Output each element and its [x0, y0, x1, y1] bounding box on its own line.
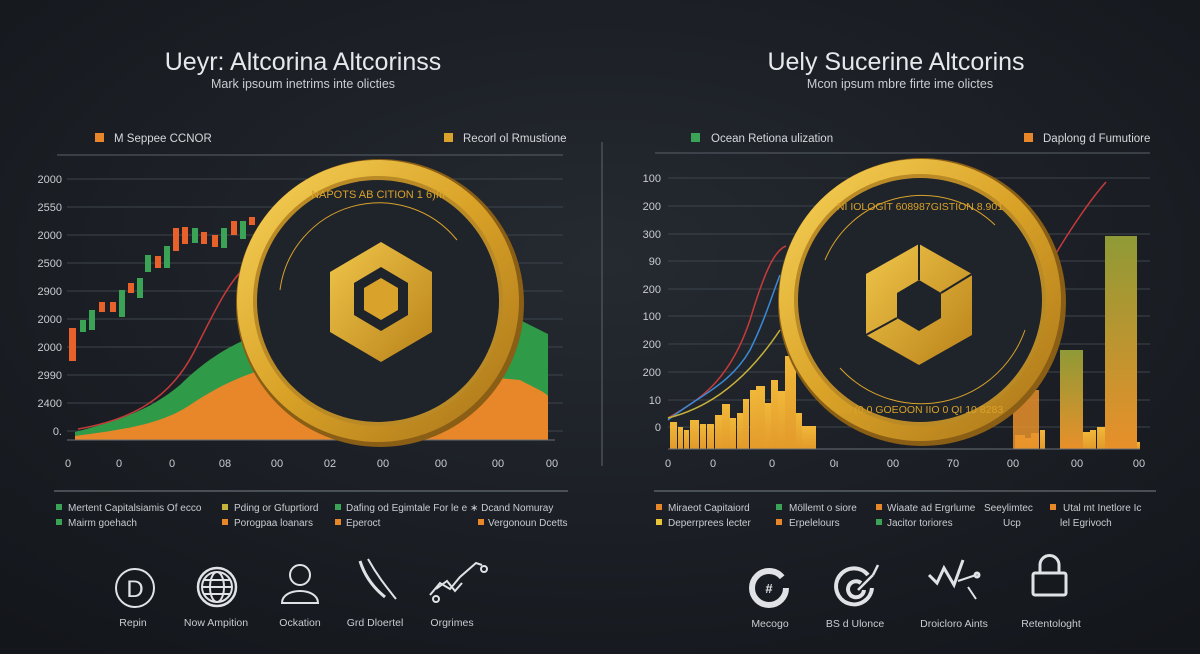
- left icon labels: Repin: [119, 617, 147, 629]
- left x axis labels: 0: [169, 458, 175, 470]
- icon: D circle: [116, 569, 154, 607]
- right bottom legend: Jacitor toriores: [887, 518, 953, 529]
- left x axis labels: 0: [65, 458, 71, 470]
- right bottom legend: Erpelelours: [789, 518, 840, 529]
- left y axis labels: 2500: [38, 258, 62, 270]
- icon: zigzag: [929, 560, 979, 599]
- icon: lock: [1033, 556, 1066, 595]
- right y axis labels: 300: [643, 229, 661, 241]
- right x axis labels: 0: [710, 458, 716, 470]
- area chart: [75, 320, 548, 440]
- right bottom legend: Ucp: [1003, 518, 1021, 529]
- left coin: NAPOTS AB CITION 1 6)III: [311, 189, 445, 201]
- icon: target: [836, 565, 878, 604]
- right x axis labels: 00: [1133, 458, 1145, 470]
- right chart legend: [691, 133, 1150, 145]
- icon: D circle: D: [126, 576, 144, 603]
- left bottom legend: Dafing od Egimtale For le e ∗ Dcand Nomuray: [346, 503, 553, 514]
- icon: trend line: [430, 563, 487, 602]
- left bottom legend: [56, 503, 568, 529]
- right coin: [778, 158, 1066, 446]
- left icon labels: Ockation: [279, 617, 321, 629]
- right bottom legend: Miraeot Capitaiord: [668, 503, 750, 514]
- right chart panel: [643, 133, 1150, 470]
- right x axis labels: 00: [1071, 458, 1083, 470]
- hexagon icon: [330, 242, 432, 362]
- left bottom legend: Porogpaa loanars: [234, 518, 313, 529]
- icon: slash: [360, 559, 396, 599]
- left chart legend: M Seppee CCNOR: [114, 133, 212, 145]
- left coin: [236, 159, 524, 447]
- left icon labels: [119, 617, 474, 629]
- left x axis labels: 00: [435, 458, 447, 470]
- left y axis labels: 2400: [38, 398, 62, 410]
- right icons row: [752, 556, 1066, 605]
- right bottom legend: lel Egrivoch: [1060, 518, 1112, 529]
- left y axis labels: 2000: [38, 342, 62, 354]
- right bottom legend: [656, 503, 1141, 529]
- icon: person: [282, 565, 318, 603]
- left chart panel: [38, 133, 567, 470]
- right y axis labels: 200: [643, 201, 661, 213]
- left y axis labels: 2900: [38, 286, 62, 298]
- left icons row: [116, 559, 487, 607]
- left icon labels: Now Ampition: [184, 617, 248, 629]
- right y axis labels: [643, 173, 661, 434]
- red trend line: [78, 268, 245, 429]
- left x axis labels: 02: [324, 458, 336, 470]
- right y axis labels: 100: [643, 173, 661, 185]
- left title: Ueyr: Altcorina Altcorinss: [165, 48, 441, 76]
- left x axis labels: 00: [492, 458, 504, 470]
- right icon labels: Retentologht: [1021, 618, 1081, 630]
- line series: [668, 246, 786, 418]
- right y axis labels: 0: [655, 422, 661, 434]
- left y axis labels: 2990: [38, 370, 62, 382]
- left x axis labels: 00: [377, 458, 389, 470]
- right y axis labels: 10: [649, 395, 661, 407]
- left y axis labels: 2550: [38, 202, 62, 214]
- left y axis labels: 2000: [38, 174, 62, 186]
- right coin: 0I0 (0.0 GOEOON IIO 0 QI 10 8283: [837, 404, 1003, 416]
- right icon labels: Mecogo: [751, 618, 789, 630]
- left y axis labels: 0.: [53, 426, 62, 438]
- left x axis labels: 0: [116, 458, 122, 470]
- left chart legend: Recorl ol Rmustione: [463, 133, 567, 145]
- icon: hash ring: [752, 571, 786, 605]
- left icon labels: Grd Dloertel: [347, 617, 403, 629]
- left y axis labels: 2000: [38, 314, 62, 326]
- bar chart: [670, 236, 1140, 449]
- icon: globe: [198, 568, 236, 606]
- right x axis labels: [665, 458, 1145, 470]
- right x axis labels: 0: [665, 458, 671, 470]
- right y axis labels: 200: [643, 284, 661, 296]
- right x axis labels: 00: [887, 458, 899, 470]
- left bottom legend: Mertent Capitalsiamis Of ecco: [68, 503, 202, 514]
- right x axis labels: 0: [769, 458, 775, 470]
- left x axis labels: 00: [271, 458, 283, 470]
- right subtitle: Mcon ipsum mbre firte ime olictes: [807, 77, 993, 91]
- left bottom legend: Vergonoun Dcetts: [488, 518, 568, 529]
- candlesticks: [69, 217, 255, 361]
- left x axis labels: [65, 458, 558, 470]
- right x axis labels: 0ι: [830, 458, 839, 470]
- icon: hash ring: #: [765, 581, 773, 596]
- right y axis labels: 200: [643, 367, 661, 379]
- right x axis labels: 00: [1007, 458, 1019, 470]
- right y axis labels: 100: [643, 311, 661, 323]
- right icon labels: Droicloro Aints: [920, 618, 988, 630]
- left y axis labels: [38, 174, 62, 438]
- left x axis labels: 08: [219, 458, 231, 470]
- right bottom legend: Utal mt Inetlore Ic: [1063, 503, 1141, 514]
- hexagon cube icon: [866, 244, 972, 365]
- left chart legend: [95, 133, 567, 145]
- right coin: NI IOLOGIT 608987GISTION 8.901: [837, 201, 1003, 213]
- right bottom legend: Möllemt o siore: [789, 503, 857, 514]
- right y axis labels: 200: [643, 339, 661, 351]
- right chart legend: Daplong d Fumutiore: [1043, 133, 1150, 145]
- left bottom legend: Pding or Gfuprtiord: [234, 503, 318, 514]
- left bottom legend: Eperoct: [346, 518, 381, 529]
- right bottom legend: Deperrprees lecter: [668, 518, 751, 529]
- right chart legend: Ocean Retiona ulization: [711, 133, 833, 145]
- right x axis labels: 70: [947, 458, 959, 470]
- right title: Uely Sucerine Altcorins: [767, 48, 1025, 76]
- left icon labels: Orgrimes: [430, 617, 474, 629]
- right icon labels: BS d Ulonce: [826, 618, 884, 630]
- left bottom legend: Mairm goehach: [68, 518, 137, 529]
- left y axis labels: 2000: [38, 230, 62, 242]
- right bottom legend: Seeylimtec: [984, 503, 1033, 514]
- left x axis labels: 00: [546, 458, 558, 470]
- left subtitle: Mark ipsoum inetrims inte olicties: [211, 77, 395, 91]
- right bottom legend: Wiaate ad Ergrlume: [887, 503, 976, 514]
- right icon labels: [751, 618, 1081, 630]
- right y axis labels: 90: [649, 256, 661, 268]
